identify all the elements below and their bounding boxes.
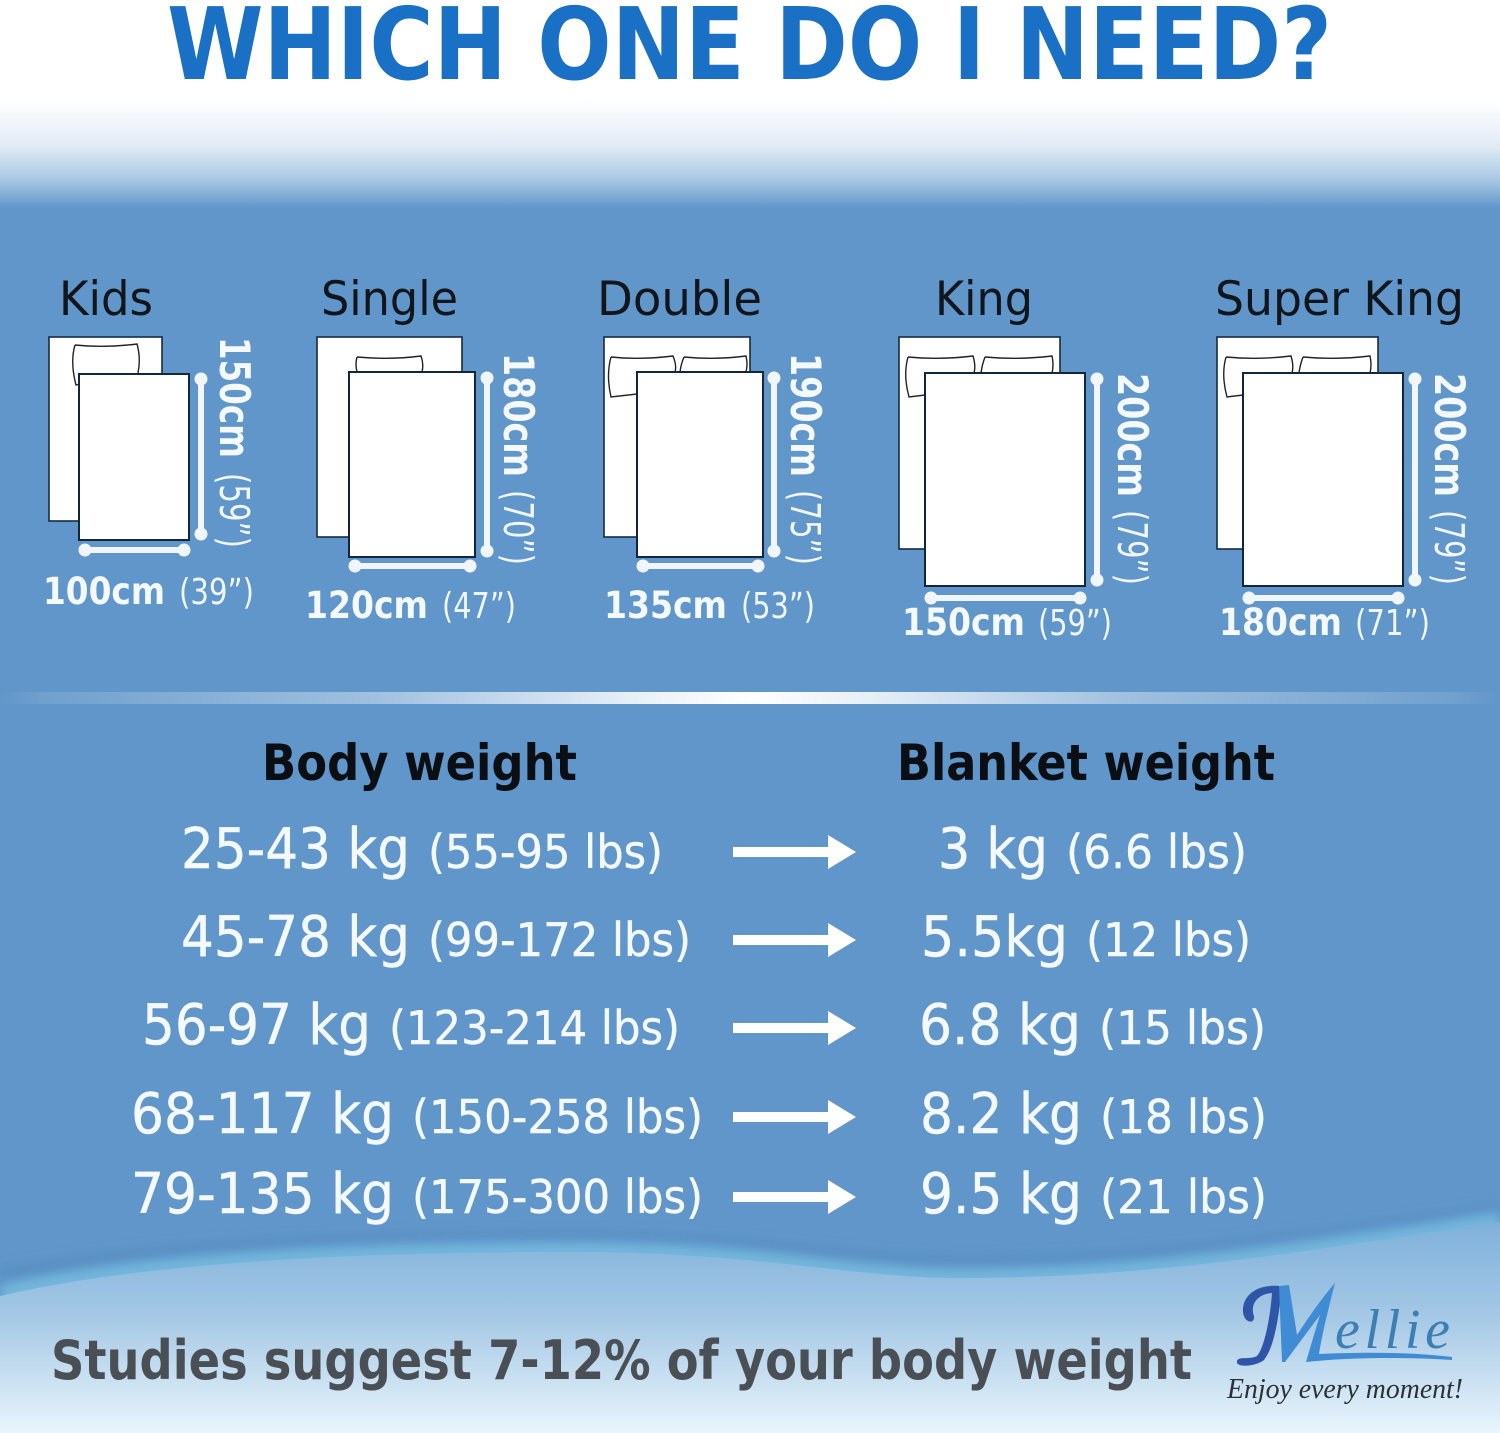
dimension arrow: height [198,376,204,538]
dimension arrow: width [352,562,474,570]
dimension arrow: height [770,374,778,554]
dimension arrow: height [1094,376,1100,584]
dimension text: height: (79”) [1425,510,1473,585]
dimension text: width: (39”) [179,572,254,613]
arrow [733,1011,856,1045]
row 4: 8.2 kg [920,1082,1082,1147]
row 1: 3 kg [938,817,1048,882]
logo mark M [1279,1283,1452,1362]
label: Kids: Kids [59,272,153,327]
panel: kids size [43,272,259,613]
dimension text: width [305,584,516,627]
dimension text: height: 190cm [781,353,830,477]
row 4: 68-117 kg [131,1082,394,1147]
row 5 [131,1162,1267,1227]
dimension text: height: (75”) [781,490,829,565]
dimension arrow: height [484,374,490,554]
dimension text: width: (47”) [442,586,516,627]
label: King: King [935,272,1033,327]
dimension text: height: (70”) [494,490,542,565]
row 1 [181,817,1247,882]
row 2: 5.5kg [921,905,1068,970]
label: Super King: Super King [1215,272,1464,327]
dimension text: height: 180cm [494,353,543,477]
row 4 [131,1082,1267,1147]
dimension text: width [604,584,815,627]
row 3 [142,993,1266,1058]
logo mark swash [1237,1286,1282,1366]
row 1: 25-43 kg [181,817,410,882]
dimension text: height: (59”) [210,473,258,548]
panel: double size [597,272,830,627]
arrow [733,1100,856,1134]
heading: blanket weight: Blanket weight [897,734,1275,792]
row 5: 79-135 kg [131,1162,394,1227]
row 3: 6.8 kg [919,993,1081,1058]
dimension text: width: (71”) [1355,603,1430,644]
icon: kids bed [49,337,189,540]
dimension text: width [43,570,254,613]
row 2: (99-172 lbs) [428,913,691,967]
label: Double: Double [597,272,762,327]
arrow [733,1180,856,1214]
panel: king size [899,272,1157,644]
panel: super king size [1215,272,1474,644]
dimension text: height: 200cm [1425,373,1474,497]
dimension arrow: width [1246,594,1402,602]
arrow [733,835,856,869]
icon: double bed [604,337,763,557]
dimension text: width: 135cm [604,584,727,627]
row 1: (6.6 lbs) [1066,825,1247,879]
row 2 [181,905,1251,970]
row 5: 9.5 kg [920,1162,1082,1227]
dimension text: height: (79”) [1108,510,1156,585]
panel: single size [305,272,543,627]
dimension text: width [902,601,1112,644]
row 2: 45-78 kg [181,905,410,970]
dimension text: width: 150cm [902,601,1025,644]
dimension arrow: width [928,594,1084,602]
label: Single: Single [321,272,458,327]
dimension text: width: (53”) [741,586,815,627]
row 3: (123-214 lbs) [389,1001,680,1055]
wave footer band [0,1204,1500,1433]
logo tagline: Enjoy every moment! [1226,1374,1463,1405]
dimension text: width: 180cm [1219,601,1342,644]
dimension text: width [1219,601,1430,644]
arrow [733,923,856,957]
row 1: (55-95 lbs) [428,825,663,879]
logo: Mellie [1226,1283,1463,1405]
dimension text: width: 120cm [305,584,428,627]
row 3: (15 lbs) [1099,1001,1266,1055]
row 4: (18 lbs) [1100,1090,1267,1144]
footer note: Studies suggest 7-12% of your body weight [51,1329,1192,1392]
logo: Mellie: ellie [1335,1299,1450,1361]
icon: king bed [899,337,1085,586]
dimension text: height: 200cm [1108,373,1157,497]
dimension text: height: 150cm [210,337,259,458]
dimension text: width: 100cm [43,570,165,613]
icon: super king bed [1217,337,1403,586]
heading: body weight: Body weight [262,734,577,792]
dimension arrow: width [640,562,762,570]
row 4: (150-258 lbs) [412,1090,703,1144]
dimension arrow: width [82,546,188,554]
row 5: (175-300 lbs) [412,1170,703,1224]
row 2: (12 lbs) [1086,913,1251,967]
row 3: 56-97 kg [142,993,371,1058]
row 5: (21 lbs) [1100,1170,1267,1224]
icon: single bed [317,337,475,557]
dimension text: width: (59”) [1038,603,1112,644]
dimension arrow: height [1412,376,1418,584]
